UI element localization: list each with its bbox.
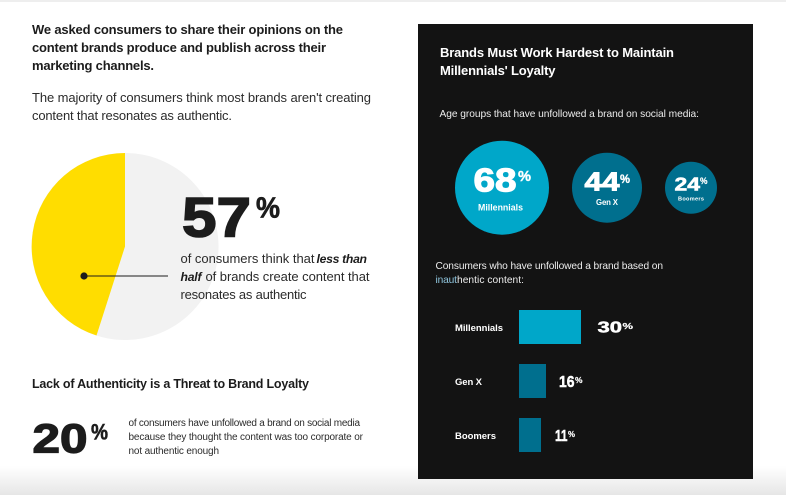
bubble: gen x 44 percent [572, 153, 642, 223]
bubble: millennials 68 percent [455, 141, 549, 235]
big stat: 57 percent: 57 [182, 186, 251, 248]
panel heading: Brands Must Work Hardest to Maintain [440, 45, 674, 60]
bubble: boomers 24 percent: 24 [674, 174, 700, 194]
bar row: gen x 16 percent: % [575, 376, 582, 385]
bar row: millennials 30 percent: % [622, 322, 633, 331]
bubble: boomers 24 percent: Boomers [678, 196, 704, 202]
intro heading: We asked consumers to share their opinions on the [32, 22, 343, 37]
intro heading [32, 22, 343, 73]
bar row: boomers 11 percent: 11 [555, 428, 568, 445]
bar chart caption: hentic content: [457, 275, 524, 286]
big stat: 20 percent [32, 416, 108, 462]
pie callout pointer [80, 272, 168, 280]
stat description: 57 percent: resonates as authentic [180, 287, 307, 302]
bar row: millennials 30 percent: 30 [598, 320, 622, 336]
panel heading [440, 45, 674, 78]
intro paragraph [32, 90, 371, 123]
bubble chart caption: Age groups that have unfollowed a brand on social media: [440, 109, 699, 120]
section heading: brand loyalty: Lack of Authenticity is a Threat to Brand Loyalty [32, 377, 309, 391]
big stat: 57 percent: % [256, 192, 280, 224]
stat description: 57 percent: of brands create content that [206, 269, 370, 284]
bar chart: unfollowed for inauthentic content [455, 310, 633, 452]
stat description: 57 percent [180, 251, 370, 302]
bar row: boomers 11 percent: % [568, 430, 575, 439]
bubble: boomers 24 percent [665, 162, 717, 214]
stat description: 57 percent: of consumers think that [180, 251, 315, 266]
intro paragraph: The majority of consumers think most brands aren't creating [32, 90, 371, 105]
bubble: millennials 68 percent: Millennials [478, 202, 523, 212]
bubble: gen x 44 percent: % [620, 172, 630, 186]
bar row: gen x 16 percent: Gen X [455, 377, 483, 388]
bar row: gen x 16 percent [455, 364, 582, 398]
bar row: boomers 11 percent: Boomers [455, 431, 496, 442]
stat description: 20 percent: of consumers have unfollowed a brand on social media [128, 418, 360, 429]
intro paragraph: content that resonates as authentic. [32, 108, 232, 123]
big stat: 57 percent [182, 186, 280, 248]
bubble: gen x 44 percent: 44 [584, 166, 620, 196]
pie chart: 57 percent [32, 153, 218, 340]
panel: millennials loyalty [418, 24, 753, 479]
stat description: 20 percent [128, 418, 364, 457]
stat description: 20 percent: because they thought the content was too corporate or [128, 432, 364, 443]
bar row: gen x 16 percent: 16 [559, 374, 575, 391]
big stat: 20 percent: 20 [32, 416, 88, 462]
stat description: 57 percent: less than [316, 252, 367, 266]
intro heading: marketing channels. [32, 58, 154, 73]
stat description: 57 percent: half [180, 270, 203, 284]
bar chart caption: Consumers who have unfollowed a brand based on [436, 261, 663, 272]
bubble: boomers 24 percent: % [700, 176, 708, 186]
big stat: 20 percent: % [91, 420, 108, 444]
bubble: millennials 68 percent: 68 [474, 162, 516, 198]
bar chart caption: inaut [436, 275, 457, 286]
bar row: millennials 30 percent [455, 310, 633, 344]
bar chart caption [436, 261, 663, 286]
bar row: boomers 11 percent [455, 418, 575, 452]
bubble: millennials 68 percent: % [518, 168, 531, 185]
bubble: gen x 44 percent: Gen X [596, 198, 619, 207]
intro heading: content brands produce and publish across their [32, 40, 326, 55]
panel heading: Millennials' Loyalty [440, 63, 556, 78]
stat description: 20 percent: not authentic enough [128, 446, 219, 457]
bar row: millennials 30 percent: Millennials [455, 323, 503, 334]
